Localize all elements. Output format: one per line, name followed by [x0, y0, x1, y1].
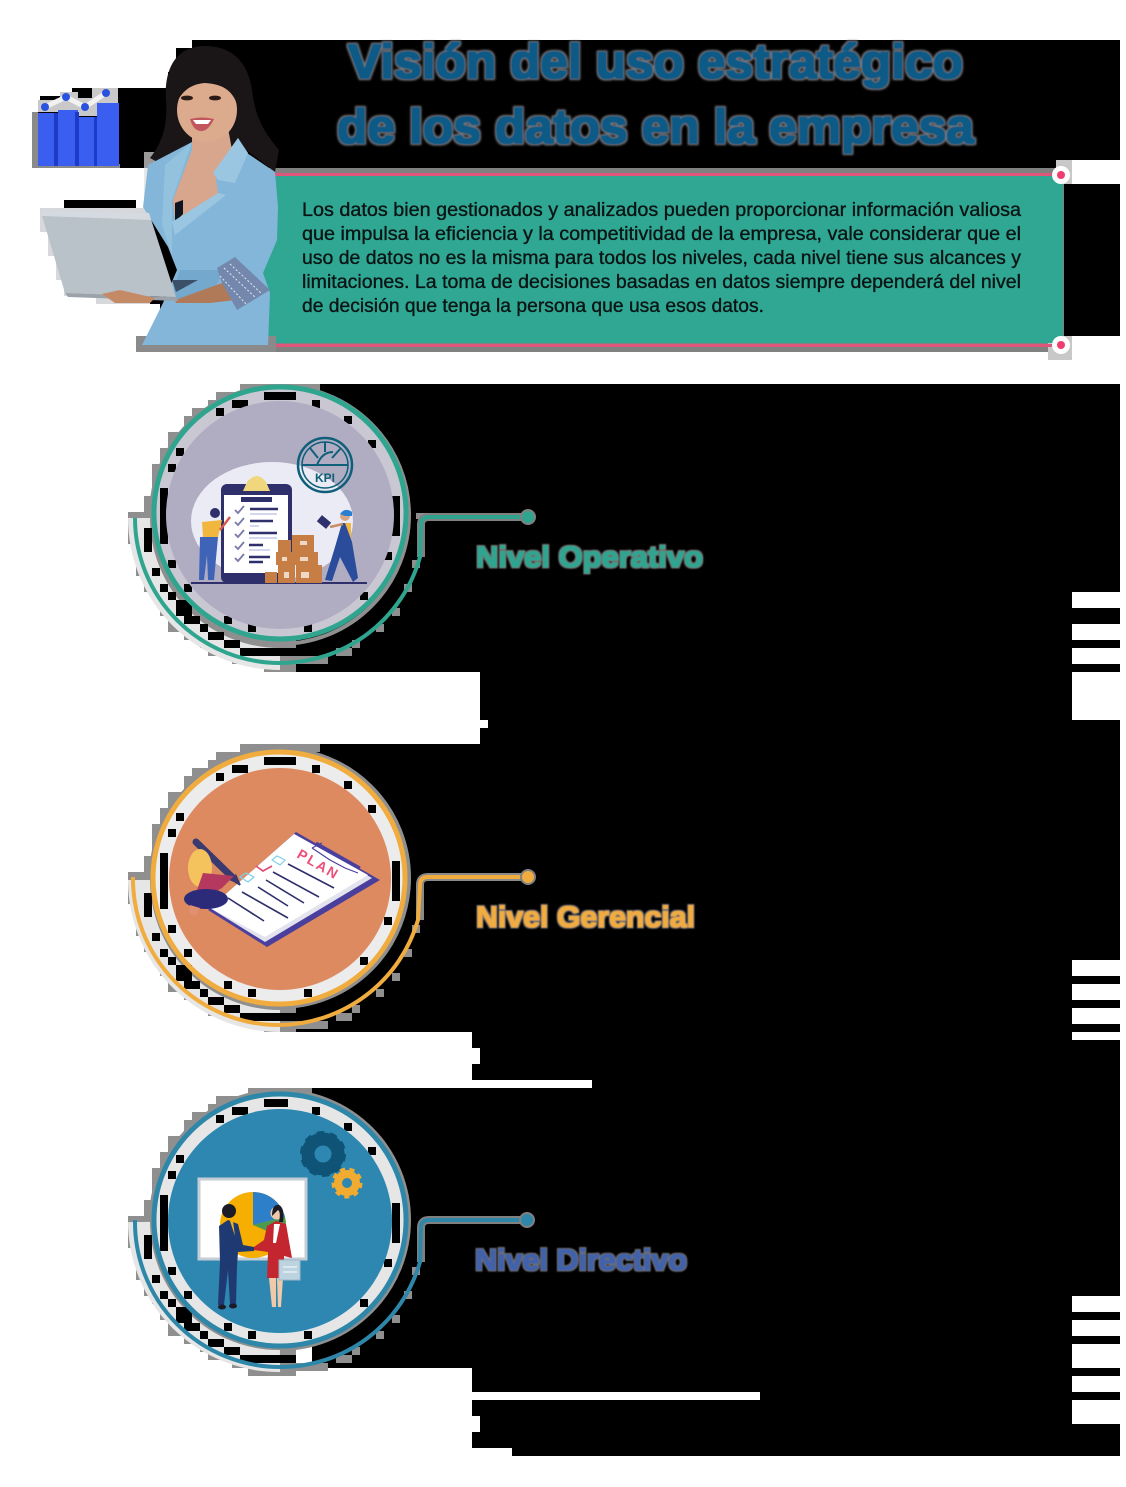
- circle: Nivel Gerencial: [128, 744, 535, 1032]
- icon: large gear: [303, 1134, 343, 1174]
- intro paragraph: que impulsa la eficiencia y la competitividad de la empresa, vale considerar que el: [302, 223, 1021, 245]
- connector dot: [521, 870, 535, 884]
- outer arc and connector: [135, 517, 528, 663]
- connector dot: [520, 1213, 534, 1227]
- icon: KPI gauge: KPI: [315, 471, 335, 485]
- heading: Nivel Operativo: Nivel Operativo: [476, 541, 703, 574]
- disk: orange background: [169, 768, 391, 990]
- circle: Nivel Directivo: [128, 1088, 534, 1376]
- disk: lavender background: [166, 401, 394, 629]
- laptop: [40, 209, 198, 301]
- illustration: plan clipboard with woman writing: [184, 832, 380, 947]
- ring: [154, 387, 406, 639]
- intro paragraph: [302, 199, 1021, 317]
- heading: Nivel Directivo: Nivel Directivo: [475, 1244, 687, 1277]
- connector dot: [521, 510, 535, 524]
- illustration: checklist, workers and boxes: [191, 462, 367, 584]
- intro paragraph: uso de datos no es la misma para todos los niveles, cada nivel tiene sus alcances y: [302, 247, 1021, 269]
- intro paragraph: limitaciones. La toma de decisiones basadas en datos siempre dependerá del nivel: [302, 271, 1021, 293]
- icon: small gear: [334, 1170, 360, 1196]
- top pin dot: [1052, 166, 1070, 184]
- icon: KPI gauge: [298, 438, 352, 492]
- ring: [153, 752, 405, 1004]
- illustration: presentation board with pie chart and two executives: [199, 1179, 306, 1310]
- icon: bar chart with trend line: [32, 88, 120, 168]
- heading: Nivel Gerencial: Nivel Gerencial: [476, 901, 695, 934]
- bottom pin dot: [1052, 336, 1070, 354]
- photo: woman holding a laptop: [40, 46, 279, 352]
- header panel: intro text box: [262, 160, 1072, 360]
- intro paragraph: Los datos bien gestionados y analizados pueden proporcionar información valiosa: [302, 199, 1021, 221]
- title: Visión del uso estratégico: [348, 36, 963, 89]
- title: de los datos en la empresa: [337, 101, 974, 154]
- circle: Nivel Operativo: [128, 384, 535, 672]
- illustration: plan clipboard with woman writing: PLAN: [294, 846, 342, 883]
- outer arc and connector: [135, 1220, 527, 1367]
- title: [337, 36, 974, 154]
- intro paragraph: de decisión que tenga la persona que usa esos datos.: [302, 295, 764, 317]
- ring: [154, 1094, 406, 1346]
- disk: blue background: [168, 1109, 392, 1333]
- outer arc and connector: [133, 877, 528, 1025]
